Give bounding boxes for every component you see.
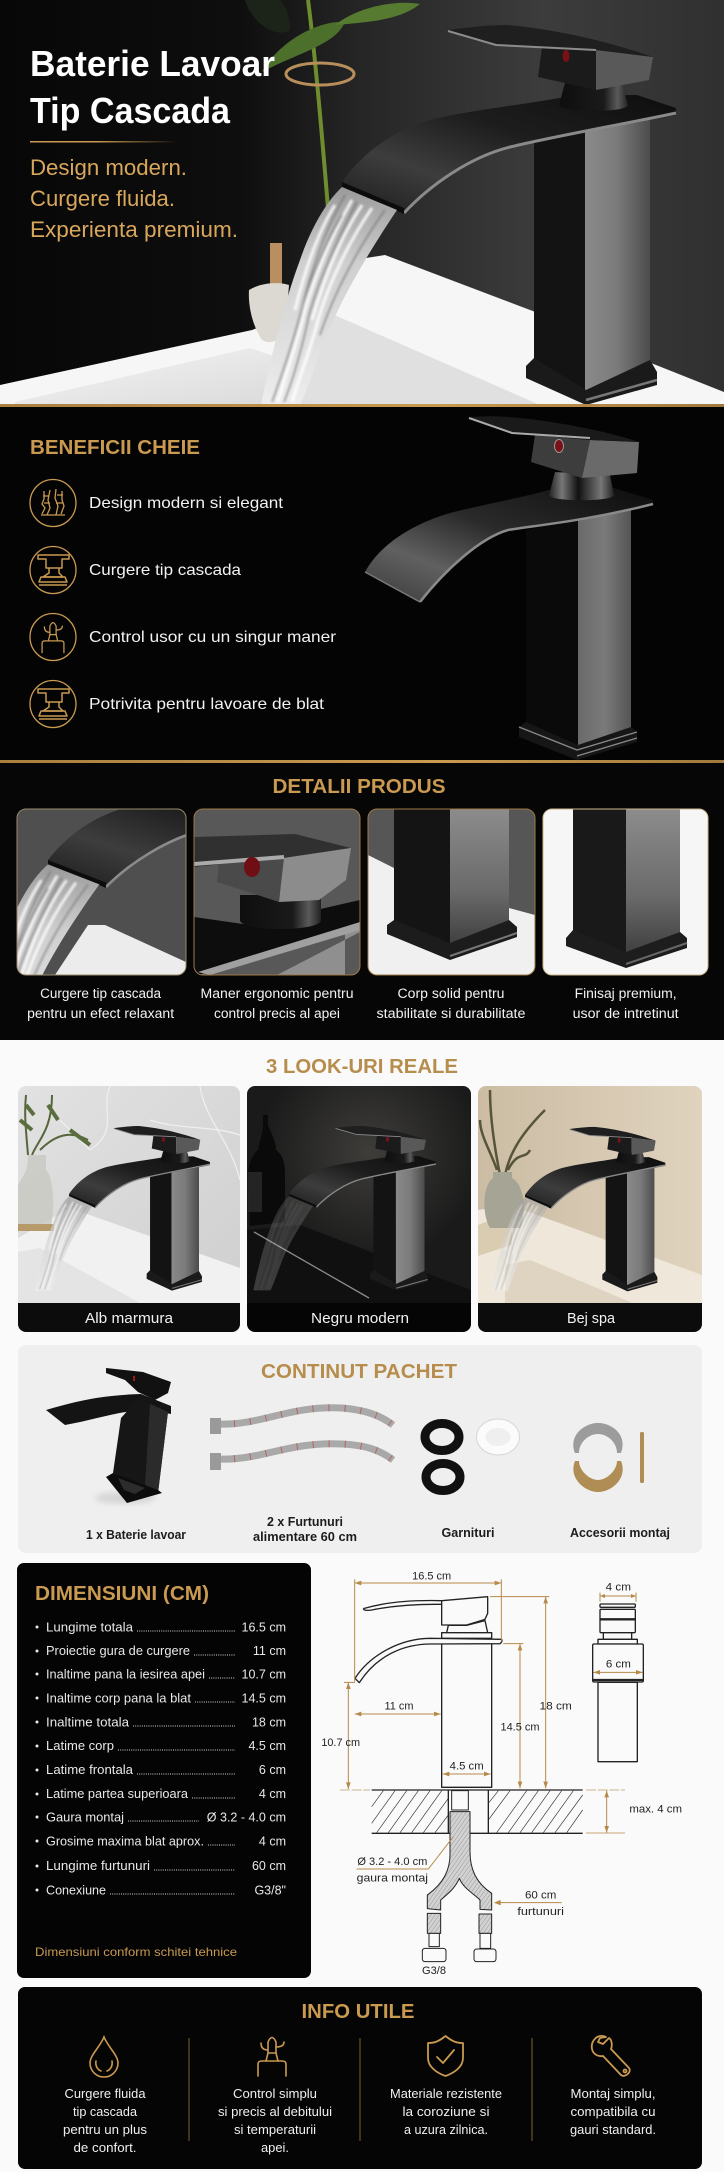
drawing labels: 18 cm [539,1700,572,1712]
dimension labels: Lungime totala [46,1620,133,1634]
drawing labels [321,1570,682,1977]
benefit 3 [30,614,337,660]
sink [0,255,724,405]
tagline: Experienta premium. [30,217,238,242]
drawing labels: gaura montaj [357,1872,428,1884]
detail card: handle [194,809,360,975]
tagline [30,155,238,242]
drawing labels: 11 cm [384,1700,414,1712]
dimension leader dots [110,1631,235,1894]
detail captions: Maner ergonomic pentru [200,986,354,1001]
info text: flow: de confort. [74,2140,136,2155]
label: Bej spa [567,1310,616,1327]
info text: flow: tip cascada [73,2104,138,2119]
drawing labels: G3/8 [422,1965,446,1977]
benefit 4 [30,680,325,728]
heading: dimensions: DIMENSIUNI (CM) [35,1582,209,1605]
drawing labels: 14.5 cm [500,1722,540,1734]
tagline: Curgere fluida. [30,186,175,211]
dimension labels: Proiectie gura de curgere [46,1644,190,1658]
icon: control [258,2038,286,2076]
detail card: body [368,809,535,975]
drawing labels: 4 cm [606,1582,631,1594]
panel: package contents [18,1345,702,1553]
detail captions: usor de intretinut [573,1006,679,1021]
dimension values [207,1620,286,1898]
detail captions: Curgere tip cascada [40,986,162,1001]
info text: control [218,2086,332,2155]
look card: modern black [247,1086,471,1332]
dimension labels [46,1620,205,1898]
info text: flow: Curgere fluida [64,2086,146,2101]
info text: control: si precis al debitului [218,2104,332,2119]
benefit 4: Potrivita pentru lavoare de blat [89,696,325,713]
heading: package: CONTINUT PACHET [261,1361,457,1383]
detail card: spout [16,808,186,976]
drawing labels: Ø 3.2 - 4.0 cm [357,1856,427,1868]
brush holder [249,243,289,342]
info text: mounting: Montaj simplu, [570,2086,656,2101]
heading: info: INFO UTILE [302,2000,414,2023]
drawing labels: furtunuri [517,1906,564,1918]
icon: shield [428,2036,463,2076]
info text: mounting: gauri standard. [570,2122,656,2137]
panel: benefits [0,404,724,762]
dimension lines [344,1579,643,1903]
info text: control: si temperaturii [234,2122,316,2137]
dimension values: Ø 3.2 - 4.0 cm [207,1810,286,1824]
drawing labels: max. 4 cm [629,1804,682,1816]
title [30,43,275,131]
dimension labels: Conexiune [46,1884,106,1898]
title: Baterie Lavoar [30,43,275,84]
panel: dimensions [17,1563,311,1978]
dimension values: 10.7 cm [242,1668,286,1682]
detail captions [27,986,679,1021]
drawing labels: 4.5 cm [450,1760,484,1772]
dimension values: 4 cm [259,1834,286,1848]
dimension arrowheads [346,1581,643,1905]
dimension labels: Latime partea superioara [46,1787,188,1801]
drawing labels: 6 cm [606,1659,631,1671]
info text: materials: a uzura zilnica. [404,2122,488,2137]
package labels: alimentare 60 cm [253,1530,357,1544]
info text: mounting [570,2086,656,2137]
look card: white marble [18,1086,240,1332]
detail captions: Finisaj premium, [575,986,677,1001]
mounting accessories [573,1423,644,1492]
info text: materials [390,2086,502,2137]
benefit 3: Control usor cu un singur maner [89,629,337,646]
dimension values: 18 cm [252,1716,286,1730]
panel: hero [0,0,724,405]
technical drawing [321,1570,682,1977]
heading: benefits: BENEFICII CHEIE [30,437,200,459]
info text: materials: Materiale rezistente [390,2086,502,2101]
dimension values: 6 cm [259,1763,286,1777]
icon: water drop [90,2037,118,2077]
dimension values: 16.5 cm [242,1620,286,1634]
heading: details: DETALII PRODUS [272,776,446,798]
label: Negru modern [311,1310,409,1327]
drawing labels: 16.5 cm [412,1570,451,1582]
drawing labels: 60 cm [525,1890,556,1902]
label: Alb marmura [85,1310,174,1327]
package labels: Garnituri [442,1526,494,1540]
dimension values: 14.5 cm [242,1692,286,1706]
side view [593,1604,643,1762]
dimension labels: Inaltime pana la iesirea apei [46,1668,205,1682]
package labels: 2 x Furtunuri [267,1515,343,1529]
look card: spa beige [478,1086,702,1332]
faucet [342,25,676,405]
hoses [210,1408,393,1470]
detail captions: stabilitate si durabilitate [376,1006,526,1021]
waterfall [261,187,397,405]
dimension values: G3/8" [254,1884,286,1898]
dimension bullets [36,1626,38,1892]
dimension values: 4 cm [259,1787,286,1801]
package labels [86,1515,670,1544]
faucet side elevation [355,1597,502,1787]
title: Tip Cascada [30,90,231,131]
title divider [30,141,178,142]
column dividers [189,2038,532,2141]
info text: control: apei. [261,2140,289,2155]
package faucet [46,1368,171,1504]
info text: mounting: compatibila cu [570,2104,656,2119]
benefit 2: Curgere tip cascada [89,562,241,579]
dimension labels: Latime frontala [46,1763,133,1777]
detail captions: Corp solid pentru [398,986,504,1001]
dimension values: 60 cm [252,1859,286,1873]
dimension values: 11 cm [253,1644,286,1658]
info text: flow: pentru un plus [63,2122,147,2137]
package labels: 1 x Baterie lavoar [86,1528,186,1542]
panel: product details [0,760,724,1040]
heading: looks: 3 LOOK-URI REALE [266,1055,458,1078]
panel: useful info [18,1987,702,2169]
dimension labels: Inaltime totala [46,1716,129,1730]
benefit 1: Design modern si elegant [89,495,284,512]
supply hoses [422,1791,496,1962]
plant with gold ring [245,0,420,270]
benefit 2 [30,546,241,594]
dimension labels: Lungime furtunuri [46,1859,150,1873]
detail captions: control precis al apei [214,1006,340,1021]
drawing labels: 10.7 cm [321,1737,360,1749]
dimensions note: Dimensiuni conform schitei tehnice [35,1945,237,1959]
info text: flow [63,2086,147,2155]
benefit 1 [30,480,284,526]
tagline: Design modern. [30,155,187,180]
gaskets [425,1419,520,1490]
detail captions: pentru un efect relaxant [27,1006,174,1021]
countertop section [340,1790,625,1833]
dimension labels: Grosime maxima blat aprox. [46,1834,204,1848]
dimension labels: Gaura montaj [46,1810,124,1824]
info text: materials: la coroziune si [402,2104,490,2119]
dimension values: 4.5 cm [248,1739,286,1753]
dimension labels: Inaltime corp pana la blat [46,1692,192,1706]
info text: control: Control simplu [233,2086,317,2101]
dimension labels: Latime corp [46,1739,114,1753]
detail card: finish [543,809,708,975]
package labels: Accesorii montaj [570,1526,670,1540]
icon: wrench [592,2036,630,2076]
benefit faucet [365,416,653,760]
